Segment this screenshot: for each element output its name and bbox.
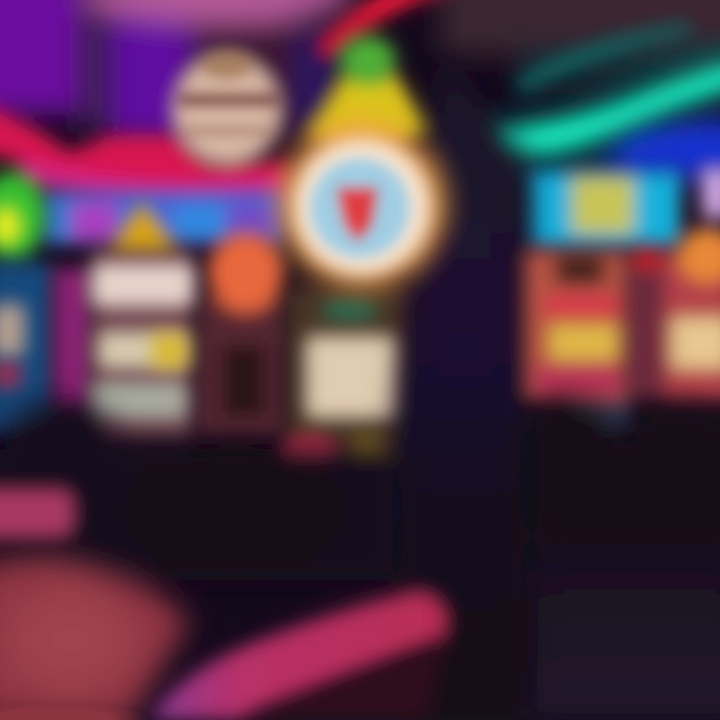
ceiling and upper wall xyxy=(0,0,720,180)
dark silhouettes xyxy=(0,400,720,720)
foreground pink seats xyxy=(0,488,448,720)
teal neon curve xyxy=(482,24,720,166)
pink and red ceiling band xyxy=(0,100,290,205)
left machine and green lamp xyxy=(0,172,91,432)
fourth machine xyxy=(280,288,410,470)
dark central pillar xyxy=(392,60,535,720)
red diagonal ceiling light xyxy=(318,0,460,62)
second machine xyxy=(92,202,194,438)
bottom edge of the near seat xyxy=(0,690,150,720)
hanging lamp: yellow and green xyxy=(305,36,430,145)
machine row glow xyxy=(45,168,720,246)
right machines xyxy=(525,227,720,432)
hanging lamp: cream shade xyxy=(173,53,281,166)
third machine xyxy=(198,232,284,436)
round sign xyxy=(280,123,444,287)
